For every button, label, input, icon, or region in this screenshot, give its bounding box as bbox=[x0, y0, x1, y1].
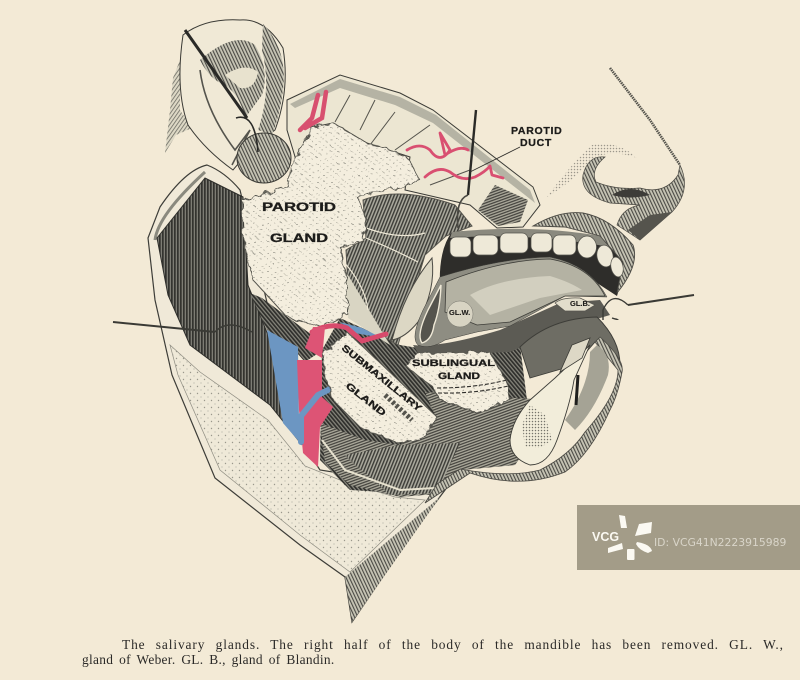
upper gum bbox=[450, 229, 615, 248]
teeth bbox=[450, 233, 625, 278]
watermark ID text: ID: VCG41N2223915989 bbox=[654, 536, 786, 549]
parotid label bbox=[262, 200, 336, 245]
gland of Weber bbox=[447, 301, 473, 327]
mouth floor bbox=[413, 300, 610, 356]
gland of Blandin: GL.B. bbox=[570, 299, 590, 308]
tongue bbox=[415, 257, 607, 347]
masseter muscle bbox=[346, 194, 472, 345]
mandible cross section bbox=[510, 338, 590, 465]
pin: cheek bbox=[457, 110, 476, 228]
sublingual label bbox=[412, 358, 495, 382]
nose bbox=[547, 68, 684, 240]
gland of Weber: GL.W. bbox=[449, 308, 470, 317]
VCG logo: VCG bbox=[592, 530, 619, 544]
pin: tongue bbox=[603, 295, 694, 320]
lower lip and chin band bbox=[425, 337, 622, 503]
parotid duct label with leader line: PAROTID bbox=[511, 125, 562, 137]
muscle fibers and nerves bbox=[342, 192, 425, 345]
lower jaw and inner cheek bbox=[520, 317, 620, 378]
parotid duct label with leader line bbox=[470, 125, 562, 172]
neck veins in blue bbox=[267, 322, 382, 445]
cheek flap bbox=[287, 75, 540, 228]
figure caption bbox=[82, 637, 784, 667]
watermark panel bbox=[577, 505, 800, 570]
carotid arteries in red bbox=[297, 326, 386, 467]
pin: neck bbox=[113, 322, 252, 332]
deep tissue underlay bbox=[320, 318, 560, 495]
sublingual gland bbox=[407, 352, 510, 413]
dark sternomastoid band bbox=[250, 293, 320, 362]
parotid duct label with leader line: DUCT bbox=[520, 137, 552, 149]
sublingual label: GLAND bbox=[438, 371, 480, 382]
facial artery branches, cheek bbox=[407, 133, 503, 179]
figure caption: gland of Weber. GL. B., gland of Blandin. bbox=[82, 652, 334, 667]
nasal shading stipple bbox=[547, 144, 637, 197]
parotid label: GLAND bbox=[270, 231, 328, 245]
neck and floor muscles bbox=[320, 392, 560, 497]
neck muscle bbox=[157, 178, 302, 445]
hair tuft bbox=[165, 60, 192, 153]
VCG logo bbox=[592, 515, 652, 560]
mouth cavity bbox=[440, 230, 627, 296]
submaxillary label: SUBMAXILLARY bbox=[339, 343, 424, 415]
submaxillary label bbox=[339, 343, 424, 419]
cheek bone lobe bbox=[392, 258, 433, 340]
facial artery branches, upper bbox=[300, 92, 326, 130]
upper lip bbox=[533, 213, 635, 293]
pin: ear bbox=[185, 30, 258, 152]
sublingual label: SUBLINGUAL bbox=[412, 358, 495, 369]
gland of Blandin bbox=[555, 298, 595, 311]
figure caption: The salivary glands. The right half of the body of the mandible has been removed. GL. W., bbox=[122, 637, 784, 652]
parotid label: PAROTID bbox=[262, 200, 336, 214]
submaxillary gland bbox=[322, 332, 437, 443]
ear bbox=[180, 20, 291, 183]
earlobe bbox=[237, 133, 291, 183]
submaxillary label: GLAND bbox=[343, 381, 388, 419]
parotid gland bbox=[242, 123, 420, 327]
illustration: salivary glands dissection bbox=[113, 20, 694, 622]
neck skin flap with fat layer bbox=[148, 165, 445, 622]
